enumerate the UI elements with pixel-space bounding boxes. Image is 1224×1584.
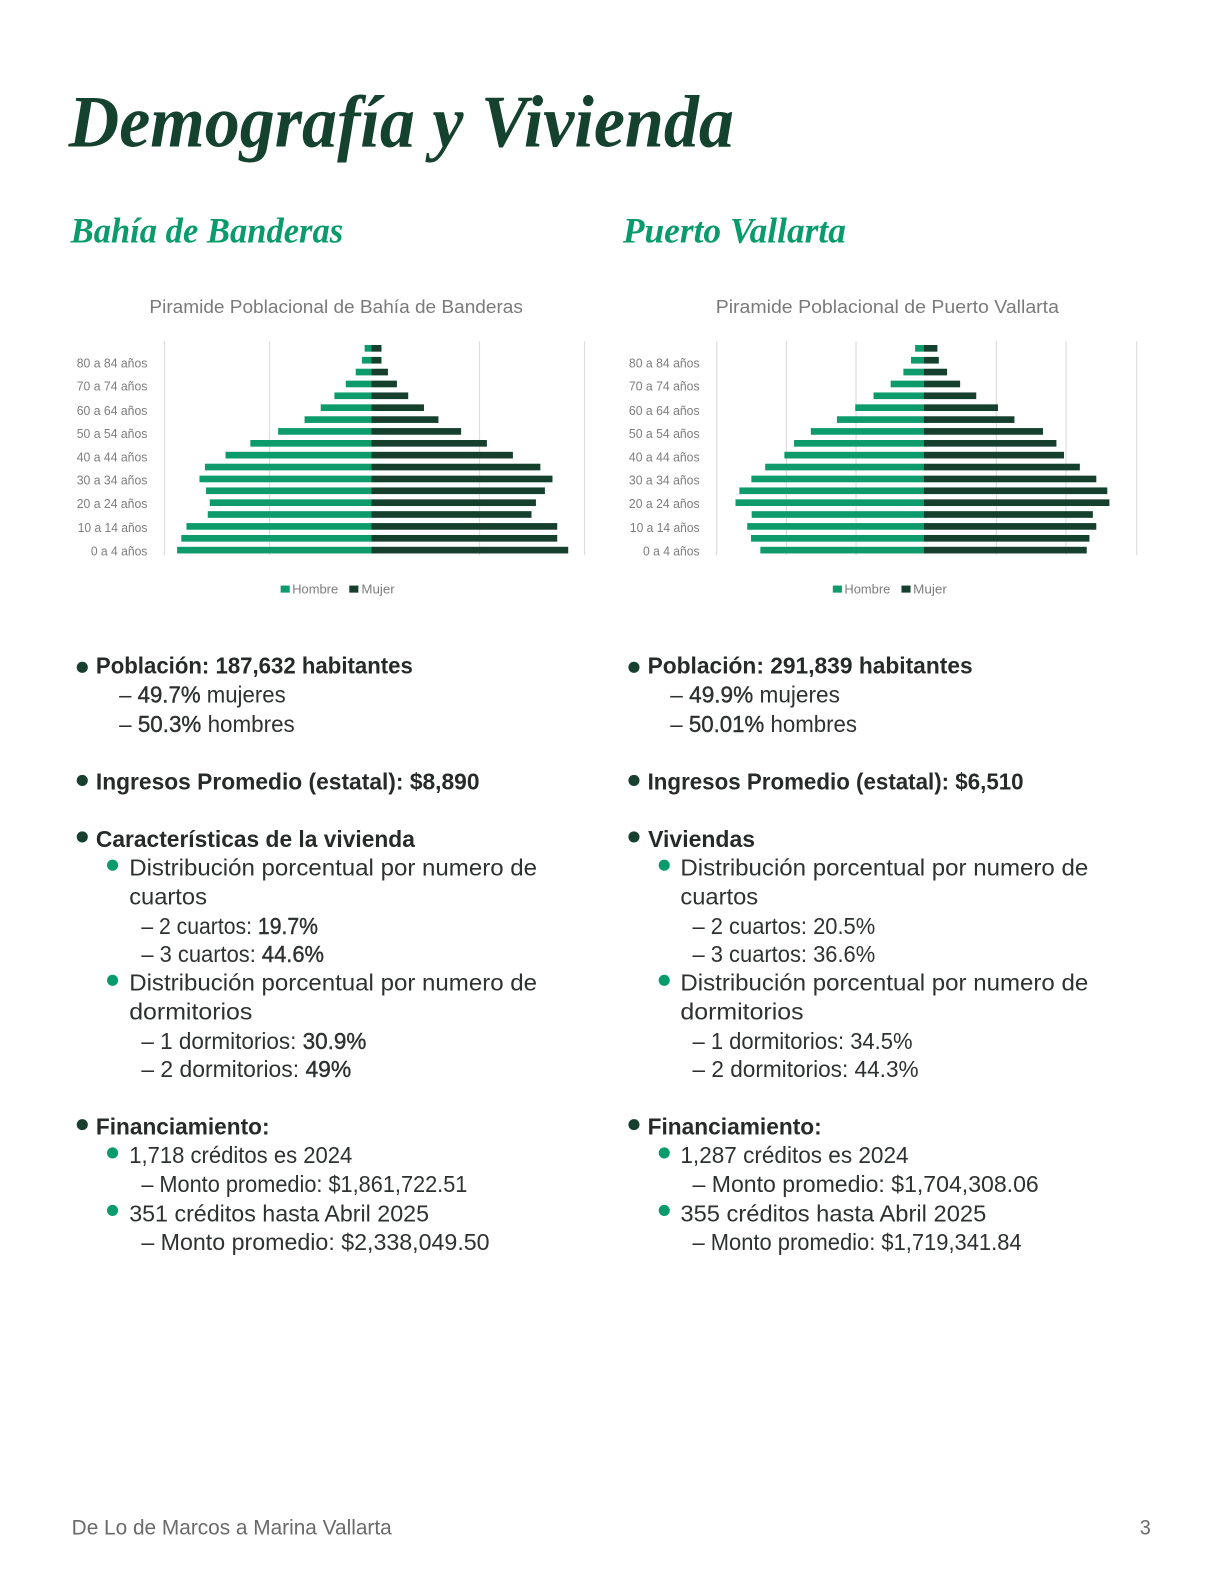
legend [281,583,395,597]
age axis labels: 10 a 14 años [78,521,147,535]
age axis labels: 30 a 34 años [629,474,700,488]
age axis labels: 20 a 24 años [77,497,147,511]
age axis labels: 60 a 64 años [77,404,147,418]
ingresos: Ingresos Promedio (estatal): $6,510 [648,768,1024,794]
características de la vivienda: – 1 dormitorios: 30.9% [141,1028,366,1054]
población: – 49.9% mujeres [670,682,840,708]
características de la vivienda: Características de la vivienda [96,826,416,852]
características de la vivienda: – 2 cuartos: 19.7% [141,913,318,939]
bars: Mujer [924,345,1109,553]
financiamiento: Financiamiento: [648,1114,822,1140]
viviendas: – 2 dormitorios: 44.3% [693,1056,919,1082]
age axis labels [77,357,147,558]
financiamiento: Financiamiento: [96,1114,270,1140]
bars: Hombre [736,345,924,553]
características de la vivienda: – 3 cuartos: 44.6% [141,941,324,967]
viviendas: – 3 cuartos: 36.6% [693,941,875,967]
legend: Mujer [361,583,395,597]
población [628,652,973,737]
chart: pirámide poblacional de Puerto Vallarta [629,297,1137,597]
características de la vivienda: dormitorios [129,999,252,1025]
legend: Hombre [292,583,338,597]
características de la vivienda: cuartos [129,884,207,910]
viviendas [628,826,1088,1082]
características de la vivienda: Distribución porcentual por numero de [129,854,537,880]
age axis labels: 80 a 84 años [77,357,147,371]
financiamiento: – Monto promedio: $2,338,049.50 [141,1229,490,1255]
población: Población: 291,839 habitantes [648,652,973,678]
financiamiento: – Monto promedio: $1,704,308.06 [693,1171,1039,1197]
población: Población: 187,632 habitantes [96,652,413,678]
heading: Puerto Vallarta: Puerto Vallarta [622,210,846,250]
legend: Hombre [844,583,890,597]
viviendas: dormitorios [680,999,804,1025]
age axis labels: 10 a 14 años [630,521,700,535]
viviendas: Viviendas [648,826,755,852]
age axis labels: 50 a 54 años [629,427,700,441]
población: – 49.7% mujeres [119,682,286,708]
bars: Hombre [177,345,371,553]
financiamiento: 355 créditos hasta Abril 2025 [680,1201,986,1227]
población [77,652,413,737]
viviendas: – 1 dormitorios: 34.5% [693,1028,913,1054]
age axis labels [629,357,700,558]
viviendas: – 2 cuartos: 20.5% [693,913,875,939]
financiamiento [77,1114,490,1255]
chart: pirámide poblacional de Bahía de Banderas [77,297,584,597]
características de la vivienda [77,826,537,1082]
ingresos: Ingresos Promedio (estatal): $8,890 [96,768,480,794]
age axis labels: 60 a 64 años [629,404,700,418]
footer text: De Lo de Marcos a Marina Vallarta [72,1516,392,1539]
text block: datos de Puerto Vallarta [628,652,1088,1255]
age axis labels: 70 a 74 años [77,380,147,394]
financiamiento: 351 créditos hasta Abril 2025 [129,1201,429,1227]
población: – 50.01% hombres [670,711,857,737]
page number: 3 [1140,1516,1151,1539]
viviendas: Distribución porcentual por numero de [680,854,1088,880]
viviendas: Distribución porcentual por numero de [680,969,1088,995]
características de la vivienda: – 2 dormitorios: 49% [141,1056,351,1082]
población: – 50.3% hombres [119,711,295,737]
age axis labels: 80 a 84 años [629,357,700,371]
chart title: Piramide Poblacional de Puerto Vallarta [716,297,1060,317]
title: Demografía y Vivienda [68,80,734,162]
chart title: Piramide Poblacional de Bahía de Banderas [149,297,523,317]
viviendas: cuartos [680,884,758,910]
age axis labels: 20 a 24 años [629,497,700,511]
text block: datos de Bahía de Banderas [77,652,537,1255]
financiamiento: – Monto promedio: $1,719,341.84 [693,1229,1022,1255]
age axis labels: 40 a 44 años [629,450,700,464]
heading: Bahía de Banderas: Bahía de Banderas [70,210,343,250]
age axis labels: 40 a 44 años [77,450,147,464]
financiamiento: 1,718 créditos es 2024 [129,1142,352,1168]
financiamiento: – Monto promedio: $1,861,722.51 [141,1171,467,1197]
bars: Mujer [371,345,568,553]
legend [833,583,947,597]
age axis labels: 30 a 34 años [77,474,147,488]
age axis labels: 0 a 4 años [91,544,147,558]
age axis labels: 50 a 54 años [77,427,147,441]
age axis labels: 70 a 74 años [629,380,700,394]
financiamiento [628,1114,1039,1255]
legend: Mujer [913,583,947,597]
financiamiento: 1,287 créditos es 2024 [680,1142,909,1168]
características de la vivienda: Distribución porcentual por numero de [129,969,537,995]
age axis labels: 0 a 4 años [643,544,700,558]
